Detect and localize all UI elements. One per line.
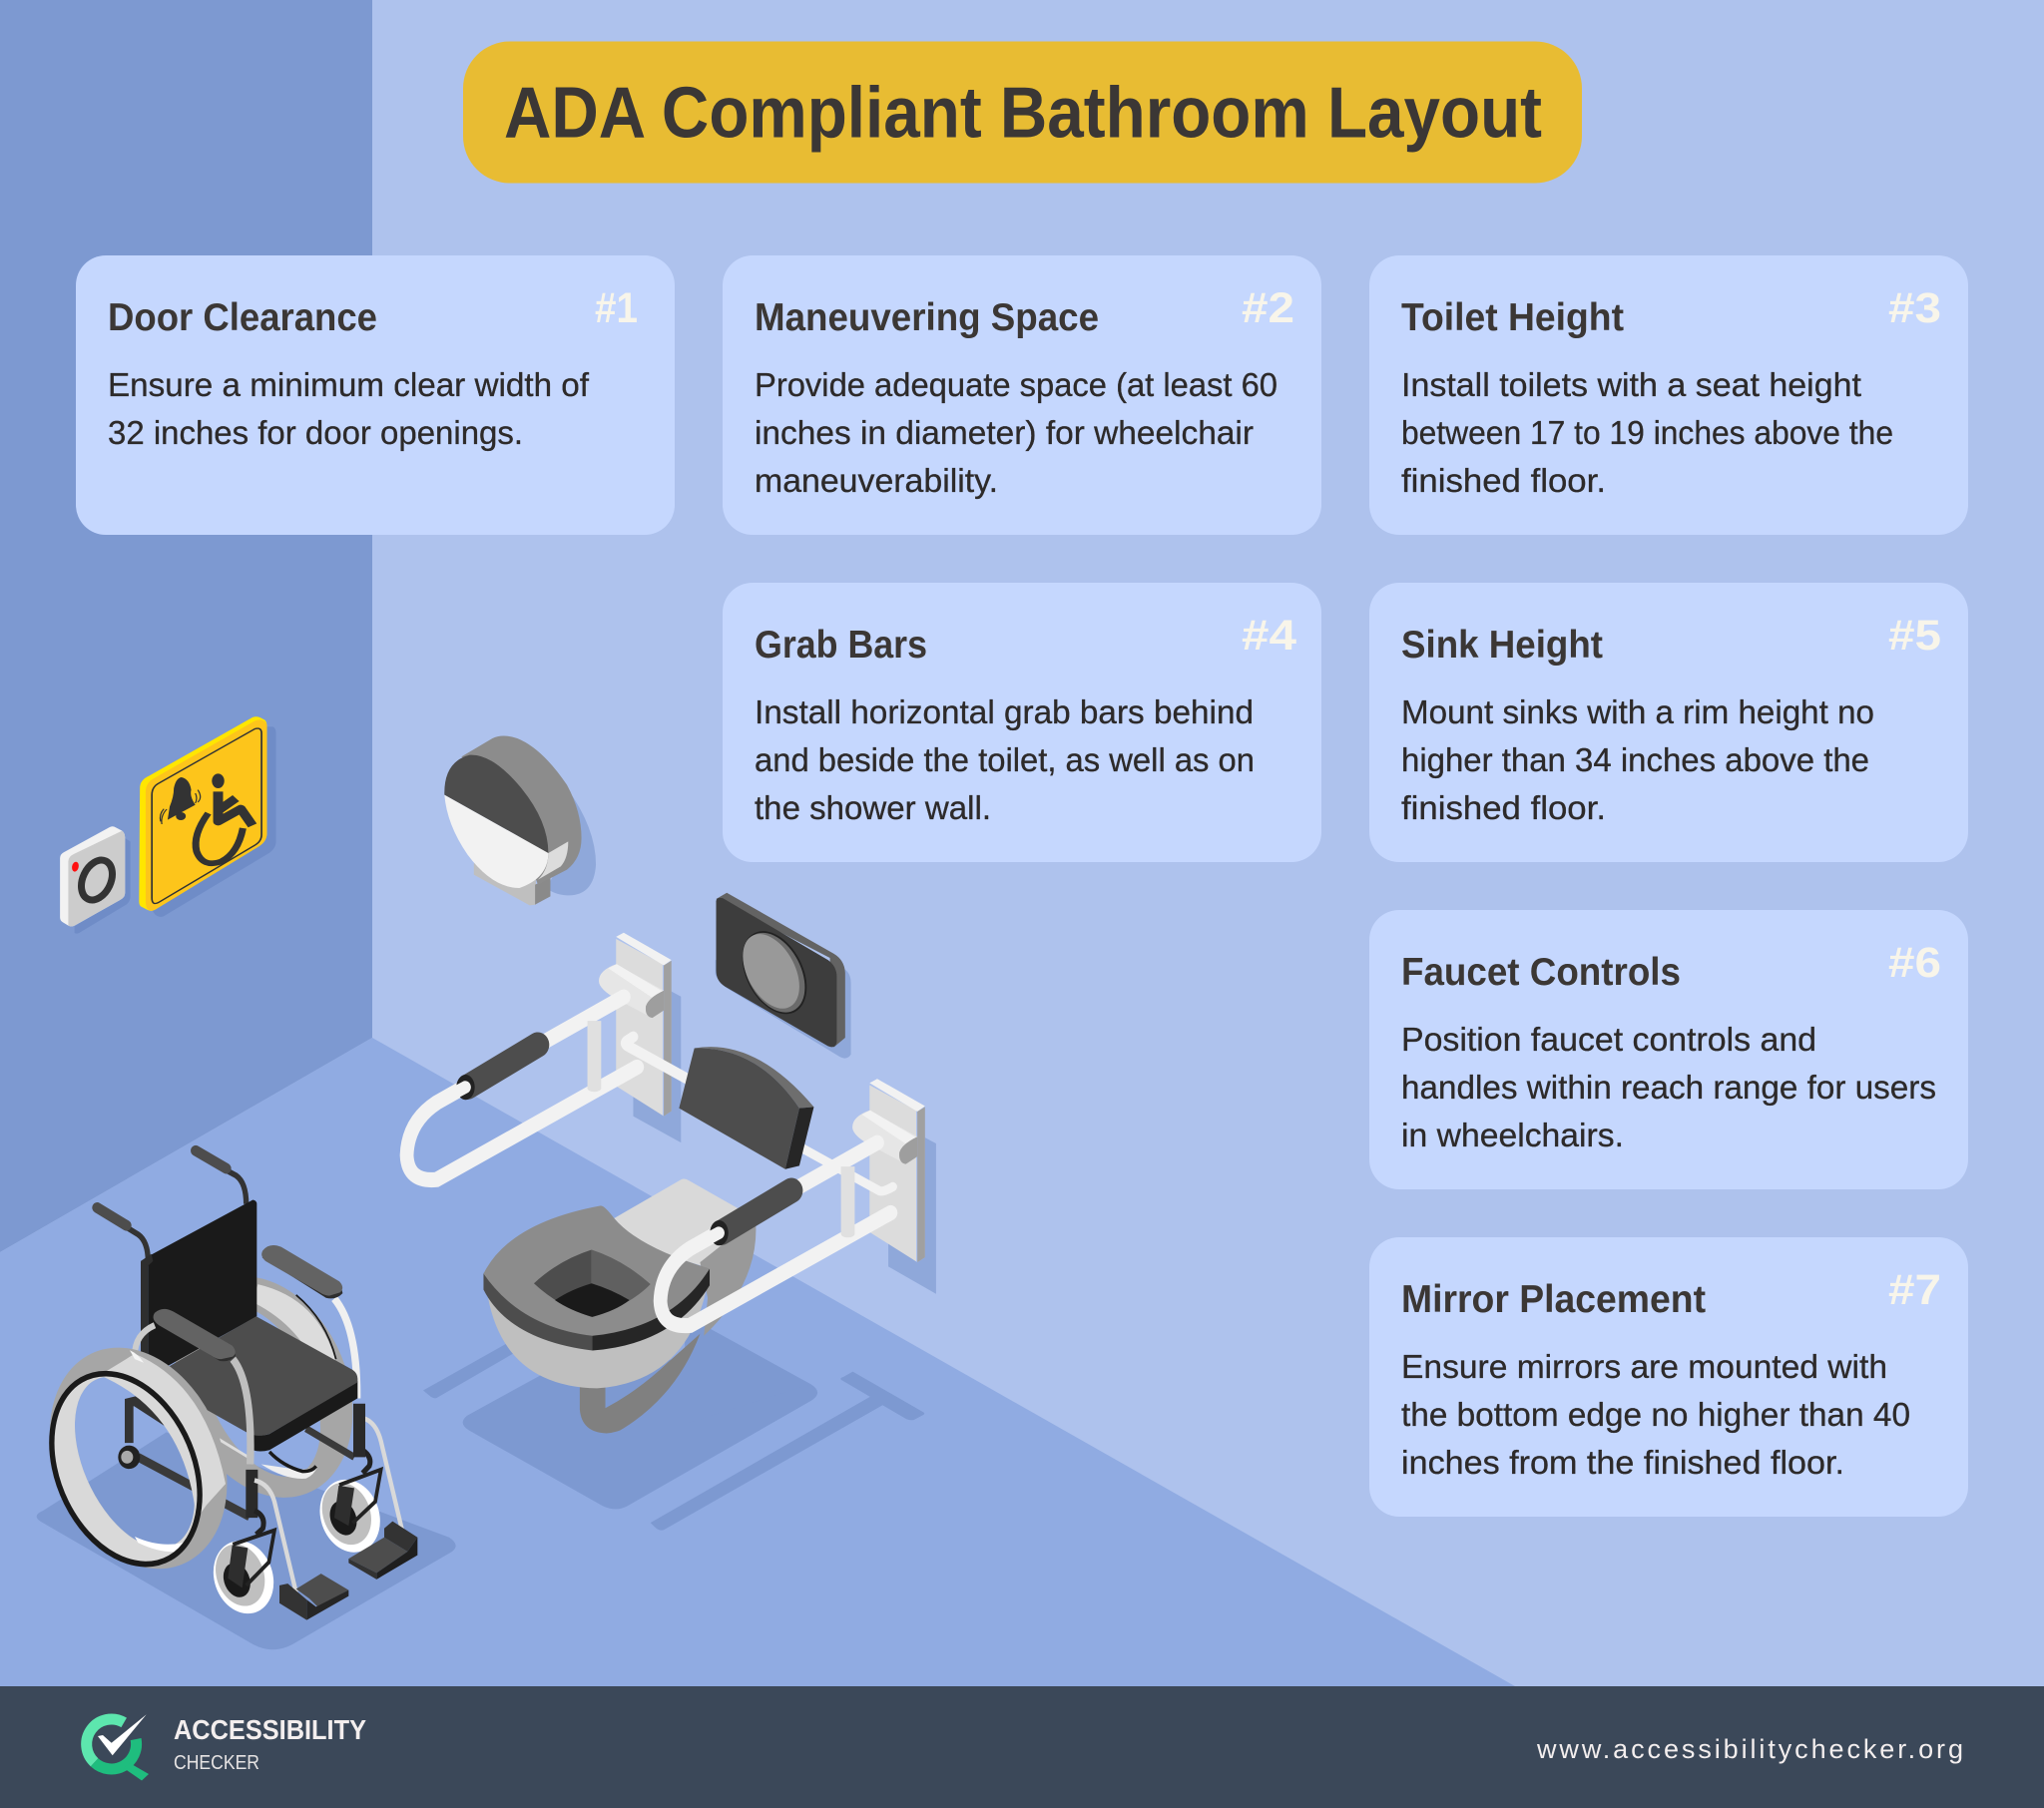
title banner: ADA Compliant Bathroom Layout (504, 74, 1542, 154)
panel: #6 faucet controls: Faucet Controls (1401, 951, 1681, 994)
footer bar (0, 1686, 2044, 1808)
left armrest (154, 1309, 236, 1361)
icon: flush plate (716, 893, 851, 1059)
logo wordmark: ACCESSIBILITY (174, 1714, 366, 1745)
panel: #5 sink height: Mount sinks with a rim height no (1401, 693, 1874, 730)
panel: #2 maneuvering space: #2 (1242, 284, 1294, 332)
backrest (141, 1199, 256, 1389)
near caster and footrest (203, 1481, 348, 1624)
panel: #4 grab bars (723, 583, 1321, 862)
panel: #6 faucet controls: handles within reach range for users (1401, 1069, 1936, 1106)
panel: #4 grab bars: Install horizontal grab bars behind (755, 693, 1254, 730)
panel: #3 toilet height: Install toilets with a seat height (1401, 366, 1861, 403)
title banner (463, 42, 1582, 184)
panel: #6 faucet controls: #6 (1888, 939, 1941, 987)
panel: #6 faucet controls: Position faucet controls and (1401, 1021, 1816, 1058)
icon: button ring (75, 855, 119, 905)
panel: #4 grab bars: the shower wall. (755, 789, 991, 826)
panel: #5 sink height: Sink Height (1401, 624, 1603, 667)
panel: #6 faucet controls (1369, 910, 1968, 1189)
panel: #2 maneuvering space: Maneuvering Space (755, 296, 1099, 339)
panel: #7 mirror placement: Mirror Placement (1401, 1278, 1706, 1321)
panel: #3 toilet height: Toilet Height (1401, 296, 1624, 339)
panel: #4 grab bars: Grab Bars (755, 624, 927, 667)
far wheel (141, 1243, 387, 1531)
panel: #7 mirror placement: Ensure mirrors are mounted with (1401, 1348, 1887, 1385)
panel: #7 mirror placement: the bottom edge no higher than 40 (1401, 1396, 1910, 1433)
panel: #3 toilet height (1369, 255, 1968, 535)
icon: wall button and accessibility alarm sign (60, 716, 276, 934)
panel: #1 door clearance: #1 (595, 284, 638, 332)
panel: #7 mirror placement: inches from the finished floor. (1401, 1444, 1844, 1481)
panel: #5 sink height: #5 (1888, 612, 1941, 660)
panel: #5 sink height: higher than 34 inches above the (1401, 741, 1869, 778)
seat cushion (163, 1316, 357, 1451)
icon: round wall mirror (444, 735, 596, 905)
right grab bar (661, 1142, 890, 1326)
panel: #2 maneuvering space (723, 255, 1321, 535)
far caster and footrest (309, 1418, 417, 1580)
icon: call button (60, 826, 131, 934)
panel: #1 door clearance: Ensure a minimum clear width of (108, 366, 590, 403)
icon: checker logo (87, 1714, 149, 1780)
panel: #7 mirror placement (1369, 1237, 1968, 1517)
push handles (97, 1150, 247, 1261)
illustration: wheelchair (15, 1150, 456, 1649)
panel: #3 toilet height: finished floor. (1401, 462, 1606, 499)
panel: #1 door clearance: 32 inches for door openings. (108, 414, 523, 451)
floor (0, 1038, 1515, 1686)
illustration: toilet with grab bars (407, 893, 936, 1531)
panel: #1 door clearance (76, 255, 675, 535)
floor shadows (423, 1315, 924, 1531)
toilet back rest (679, 1047, 893, 1191)
panel: #7 mirror placement: #7 (1888, 1266, 1941, 1314)
logo wordmark (174, 1714, 366, 1774)
toilet (483, 1179, 756, 1433)
panel: #1 door clearance: Door Clearance (108, 296, 377, 339)
panel: #2 maneuvering space: Provide adequate space (at least 60 (755, 366, 1278, 403)
left grab bar (407, 997, 689, 1180)
website url: www.accessibilitychecker.org (1536, 1734, 1963, 1764)
right grab bar plate (852, 1079, 936, 1294)
panel: #2 maneuvering space: inches in diameter) for wheelchair (755, 414, 1254, 451)
right arm support (334, 1298, 357, 1398)
panel: #6 faucet controls: in wheelchairs. (1401, 1117, 1624, 1153)
icon: yellow alarm sign (139, 716, 276, 917)
panel: #4 grab bars: #4 (1242, 612, 1296, 660)
left wall (0, 0, 372, 1252)
wheelchair floor shadow (37, 1432, 456, 1649)
left grab bar plate (599, 933, 681, 1142)
panel: #3 toilet height: between 17 to 19 inches above the (1401, 414, 1893, 451)
panel: #5 sink height: finished floor. (1401, 789, 1606, 826)
left arm support (135, 1325, 251, 1464)
panel: #5 sink height (1369, 583, 1968, 862)
panel: #4 grab bars: and beside the toilet, as well as on (755, 741, 1255, 778)
panel: #3 toilet height: #3 (1888, 284, 1941, 332)
panel: #2 maneuvering space: maneuverability. (755, 462, 998, 499)
right armrest (261, 1245, 342, 1298)
rear frame (118, 1401, 359, 1518)
near wheel (15, 1314, 261, 1602)
logo wordmark: CHECKER (174, 1752, 259, 1774)
